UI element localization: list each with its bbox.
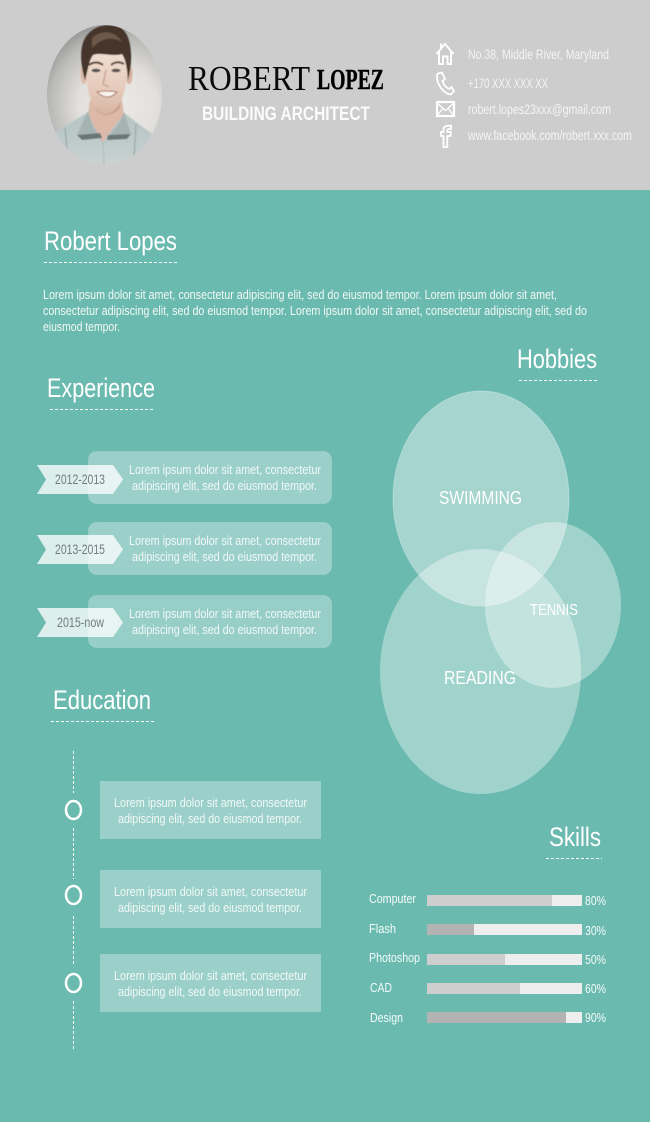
name — [188, 59, 384, 98]
icon: facebook — [441, 126, 451, 147]
education row 3: Lorem ipsum dolor sit amet, consectetur — [114, 968, 308, 983]
panel: experience — [37, 373, 332, 648]
experience row 1 — [37, 452, 332, 504]
experience row 3 — [37, 596, 332, 648]
summary paragraph: eiusmod tempor. — [43, 319, 120, 334]
nose shadow — [103, 70, 109, 87]
experience row 1: adipiscing elit, sed do eiusmod tempor. — [132, 478, 317, 493]
contact phone: +170 XXX XXX XX — [468, 76, 548, 91]
summary paragraph — [43, 287, 587, 334]
icon: house — [436, 44, 454, 64]
skill: design: 90% — [585, 1010, 606, 1025]
venn diagram: TENNIS — [530, 602, 578, 619]
name: LOPEZ — [317, 65, 384, 96]
experience row 1: 2012-2013 — [55, 471, 105, 487]
skill: flash — [369, 921, 606, 938]
education row 3 — [100, 954, 321, 1012]
ears — [80, 64, 88, 84]
education row 2: Lorem ipsum dolor sit amet, consectetur — [114, 884, 308, 899]
contact email: robert.lopes23xxx@gmail.com — [468, 102, 611, 117]
experience row 2: 2013-2015 — [55, 541, 105, 557]
education row 2: adipiscing elit, sed do eiusmod tempor. — [118, 900, 302, 915]
name: ROBERT — [188, 59, 310, 98]
header band — [0, 0, 650, 190]
timeline — [66, 751, 81, 1050]
skill: cad: CAD — [370, 980, 392, 995]
job title: BUILDING ARCHITECT — [202, 104, 370, 125]
education row 2 — [100, 870, 321, 928]
skill: flash: 30% — [585, 923, 606, 938]
skill: computer — [369, 891, 606, 908]
heading: Robert Lopes: Robert Lopes — [44, 226, 177, 256]
experience row 2: adipiscing elit, sed do eiusmod tempor. — [132, 549, 317, 564]
skill: photoshop: Photoshop — [369, 950, 420, 965]
education row 1 — [100, 781, 321, 839]
experience row 3: 2015-now — [57, 614, 105, 630]
skill: flash: Flash — [369, 921, 396, 936]
heading: Education: Education — [53, 685, 151, 715]
education row 1: adipiscing elit, sed do eiusmod tempor. — [118, 811, 302, 826]
heading: Hobbies: Hobbies — [517, 344, 597, 374]
skill: computer: Computer — [369, 891, 417, 906]
icon: envelope — [437, 102, 454, 116]
skill: photoshop — [369, 950, 606, 967]
skill: cad — [370, 980, 606, 996]
venn diagram: SWIMMING — [439, 488, 522, 508]
collar — [77, 111, 131, 145]
experience row 2: Lorem ipsum dolor sit amet, consectetur — [129, 533, 322, 548]
education row 3: adipiscing elit, sed do eiusmod tempor. — [118, 984, 302, 999]
education row 1: Lorem ipsum dolor sit amet, consectetur — [114, 795, 308, 810]
face — [86, 50, 128, 114]
panel: education — [51, 685, 321, 1050]
skill: cad: 60% — [585, 981, 606, 996]
shoulders and shirt — [56, 113, 152, 165]
experience row 3: Lorem ipsum dolor sit amet, consectetur — [129, 606, 322, 621]
skill: design — [370, 1010, 606, 1025]
panel: hobbies — [380, 344, 621, 794]
panel: skills — [369, 822, 606, 1025]
heading: Experience: Experience — [47, 373, 155, 403]
venn diagram — [380, 391, 621, 794]
hair — [81, 25, 131, 80]
smile — [97, 91, 117, 97]
experience row 1: Lorem ipsum dolor sit amet, consectetur — [129, 462, 322, 477]
skill: photoshop: 50% — [585, 952, 606, 967]
skill: computer: 80% — [585, 893, 606, 908]
contact address: No.38, Middle River, Maryland — [468, 47, 609, 62]
heading: Skills: Skills — [549, 822, 601, 852]
experience row 2 — [37, 522, 332, 574]
portrait photo — [47, 25, 164, 170]
experience row 3: adipiscing elit, sed do eiusmod tempor. — [132, 622, 317, 637]
icon: phone — [437, 72, 454, 94]
panel: summary — [43, 226, 587, 334]
venn diagram: READING — [444, 668, 516, 688]
summary paragraph: Lorem ipsum dolor sit amet, consectetur adipiscing elit, sed do eiusmod tempor. Lorem ipsum dolor sit amet, — [43, 287, 557, 302]
skill: design: Design — [370, 1010, 403, 1025]
brows and eyes — [89, 62, 124, 65]
neck — [88, 100, 124, 143]
